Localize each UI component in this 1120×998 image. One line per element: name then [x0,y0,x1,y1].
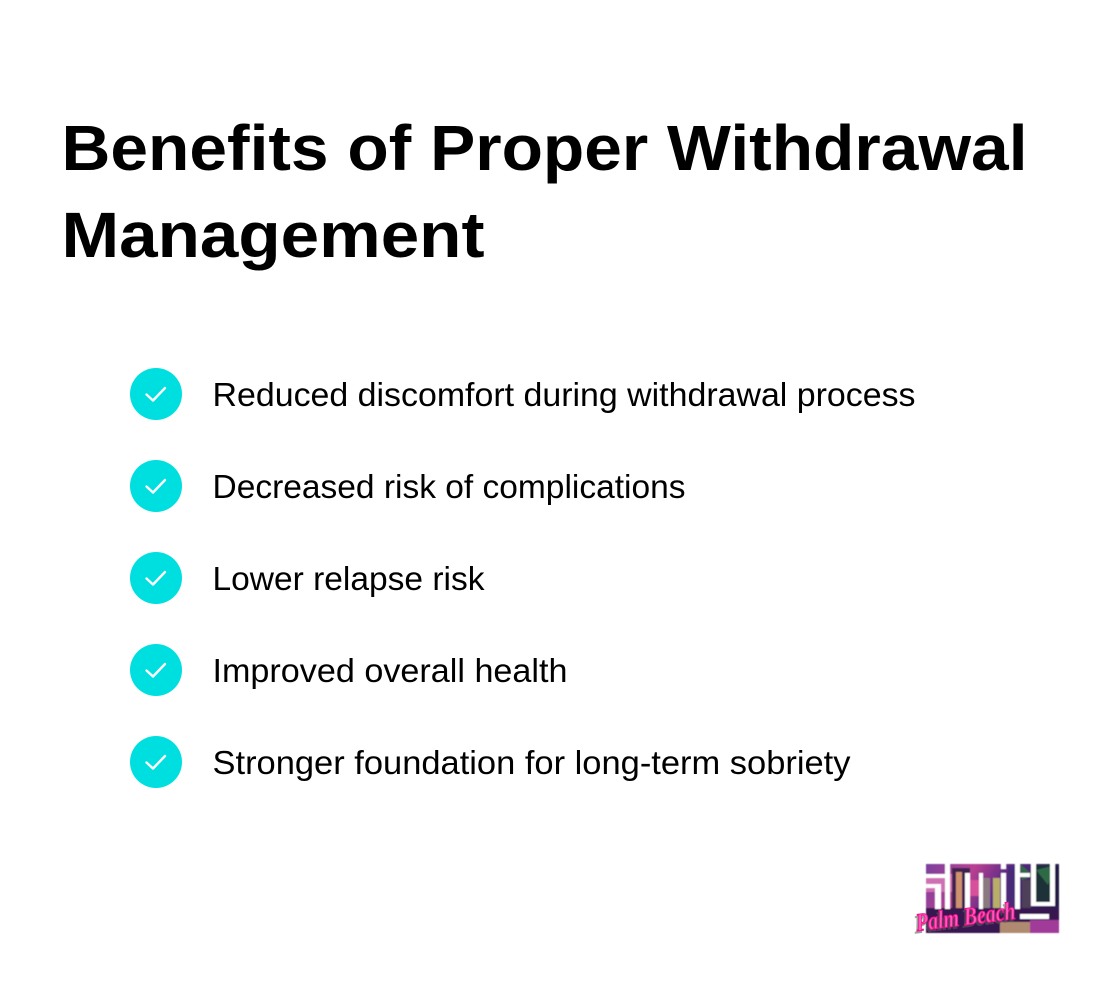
item: reduced discomfort: Reduced discomfort during withdrawal process [212,376,916,413]
item: decreased risk [130,460,686,512]
title: Management [62,199,484,271]
logo cityscape photo and wordmark [926,864,1059,933]
item: improved health [130,644,568,696]
item: decreased risk: Decreased risk of complications [212,468,686,505]
item: reduced discomfort [130,368,916,420]
item: improved health: Improved overall health [212,652,568,689]
logo: amity Palm Beach [914,864,1059,937]
title: Benefits of Proper Withdrawal [62,112,1028,184]
item: stronger foundation [130,736,851,788]
item: stronger foundation: Stronger foundation for long-term sobriety [212,744,851,781]
title [62,112,1028,271]
item: lower relapse [130,552,485,604]
benefits list [130,368,916,788]
item: lower relapse: Lower relapse risk [212,560,485,597]
logo script text: Palm Beach [914,898,1017,937]
